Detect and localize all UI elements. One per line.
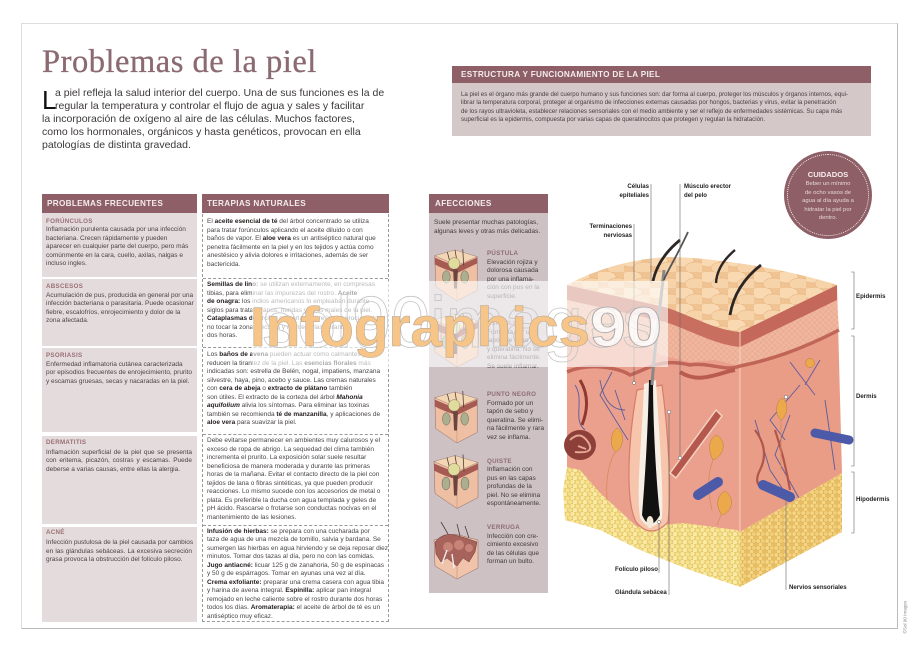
therapy: acné — [207, 528, 388, 620]
therapy: dermatitis: horas de la mañana. Evitar el contacto directo de la piel con — [207, 471, 379, 478]
afecciones intro: Suele presentar muchas patologías, — [434, 219, 538, 226]
text: estructura — [461, 91, 848, 123]
heading: problemas frecuentes: PROBLEMAS FRECUENTES — [47, 199, 163, 208]
therapy: acné: Jugo antiacné: licuar 125 g de zanahoria, 50 g de espinacas — [207, 562, 384, 569]
label: hipodermis: Hipodermis — [856, 496, 890, 503]
heading: afecciones: AFECCIONES — [435, 199, 492, 208]
card: forúnculos: comúnmente en la cara, cuello, axilas, nalgas e — [46, 252, 183, 259]
punto negro text: vez se inflama. — [487, 434, 530, 441]
credit: ©Sol 90 Images — [902, 601, 908, 634]
card: dermatitis: DERMATITIS — [46, 439, 86, 446]
pústula text — [487, 249, 540, 300]
therapy: dermatitis: incrementa el prurito. La exposición solar suele resultar — [207, 454, 366, 461]
card: psoriasis — [42, 348, 197, 432]
therapy: psoriasis: son útiles. El extracto de la corteza del árbol Mahonia — [207, 394, 363, 401]
pústula text: superficie. — [487, 293, 517, 300]
therapy: acné: remojado en leche caliente sobre el rostro durante dos horas — [207, 596, 382, 603]
card: forúnculos: Inflamación purulenta causada por una infección — [46, 226, 186, 233]
divider — [203, 278, 388, 279]
text: estructura: de los rayos ultravioleta, establecer relaciones sensoriales con el medio ambiente y ser el reflejo de enfermedades sistémicas. Su capa más — [461, 108, 842, 115]
text: estructura: La piel es el órgano más grande del cuerpo humano y sus funciones son: dar forma al cuerpo, proteger los músculos y órganos internos, equi- — [461, 91, 848, 98]
divider — [203, 525, 388, 526]
heading: estructura: ESTRUCTURA Y FUNCIONAMIENTO DE LA PIEL — [461, 70, 660, 79]
therapy: forúnculos: El aceite esencial de té del árbol concentrado se utiliza — [207, 218, 369, 225]
drop cap: L — [42, 85, 56, 115]
panel: problemas frecuentes — [42, 194, 197, 622]
watermark: 90 — [590, 295, 662, 358]
therapy: acné: sumergen las hierbas en agua hirviendo y se deja reposar diez — [207, 545, 388, 552]
heading: estructura — [452, 66, 871, 83]
therapy: dermatitis: reacciones. Lo mismo sucede con los accesorios de metal o — [207, 488, 380, 495]
callout text: agua al día ayuda a — [802, 198, 854, 204]
therapy: forúnculos — [207, 218, 376, 268]
callout text: de ocho vasos de — [805, 190, 851, 196]
divider — [203, 434, 388, 435]
therapy: dermatitis: exceso de ropa de abrigo. La sequedad del clima también — [207, 446, 374, 453]
card: abscesos — [42, 279, 197, 346]
pústula text: ción con pus en la — [487, 284, 539, 291]
therapy: acné: minutos. Tomar dos tazas al día, pero no con las comidas. — [207, 553, 375, 560]
card: forúnculos — [42, 213, 197, 277]
label: músculo erector — [684, 183, 732, 199]
quiste text: Inflamación con — [487, 466, 533, 473]
sweat gland — [564, 430, 596, 460]
heading: terapias naturales: TERAPIAS NATURALES — [207, 199, 306, 208]
quiste text: piel. No se elimina — [487, 492, 540, 499]
therapy: dermatitis: plata. Es preferible la ducha con agua templada y geles de — [207, 497, 376, 504]
text: estructura: superficial es la epidermis, compuesta por varias capas de queratinocitos que protegen y regulan la hidratación. — [461, 116, 765, 123]
icon: punto negro — [435, 391, 477, 443]
therapy: dermatitis — [207, 437, 380, 521]
therapy: psoriasis — [207, 351, 380, 426]
card: acné: en las glándulas sebáceas. La excesiva secreción — [46, 548, 192, 555]
nerve fibres — [607, 420, 781, 525]
label: células epiteliales: Células — [627, 183, 649, 190]
intro text: patologías de distinta gravedad. — [42, 139, 191, 151]
label: epidermis: Epidermis — [856, 293, 885, 300]
therapy: dermatitis: mantenimiento de las lesiones. — [207, 514, 296, 521]
label: músculo erector: del pelo — [684, 192, 707, 199]
label: nervios sensoriales: Nervios sensoriales — [789, 584, 847, 591]
therapy: forúnculos: para tratar forúnculos aplicando el aceite diluido o con — [207, 227, 363, 234]
therapy: acné: y harina de avena integral. Espinilla: aplicar pan integral — [207, 587, 371, 594]
text: estructura: librar la temperatura corporal, proteger al organismo de infecciones externas causadas por hongos, bacterias y virus, evitar la penetración — [461, 99, 836, 106]
quiste text: QUISTE — [487, 458, 512, 465]
icon: pústula — [435, 249, 477, 301]
afecciones intro: algunas leves y otras más delicadas. — [434, 228, 540, 235]
panel: afecciones — [429, 194, 548, 593]
callout ring — [787, 154, 869, 236]
therapy: abscesos: dos horas. — [207, 332, 237, 339]
card: acné: ACNÉ — [46, 529, 65, 536]
label: glándula sebácea: Glándula sebácea — [615, 589, 667, 596]
card: dermatitis — [42, 436, 197, 524]
therapy: acné: Crema exfoliante: preparar una crema casera con agua tibia — [207, 579, 384, 586]
label: dermis: Dermis — [856, 393, 877, 400]
quiste text: espontáneamente. — [487, 500, 541, 507]
pústula text: por una inflama- — [487, 276, 534, 283]
intro text: como los hormonales, orgánicos y hasta genéticos, provocan en ella — [42, 126, 361, 138]
espinilla text: elimina fácilmente. — [487, 354, 541, 361]
card: psoriasis: por episodios frecuentes de enrojecimiento, prurito — [46, 369, 192, 376]
therapy: dermatitis: pH ácido. Rascarse o frotarse son conductas nocivas en el — [207, 505, 376, 512]
blood vessels — [698, 433, 849, 497]
card: abscesos: fiebre, escalofríos, enrojecimiento y dolor de la — [46, 309, 180, 316]
verruga text — [487, 524, 539, 565]
intro text: la incorporación de oxígeno al aire de las células. Muchos factores, — [42, 113, 355, 125]
espinilla text: y queratina. No se — [487, 346, 540, 353]
therapy: psoriasis: reducen la tirantez de la piel. Las esencias florales más — [207, 360, 371, 367]
card: psoriasis: y escamas gruesas, secas y nacaradas en la piel. — [46, 378, 189, 385]
therapy: psoriasis: aquifolium alivia los síntomas. Para eliminar las toxinas — [207, 402, 369, 409]
espinilla text: ESPINILLA — [487, 320, 522, 327]
card: dermatitis: con eritema, picazón, costras y escamas. Puede — [46, 457, 192, 464]
therapy: psoriasis: Los baños de avena pueden actuar como calmantes y — [207, 351, 366, 358]
heading: afecciones — [429, 194, 548, 213]
verruga text: de las células que — [487, 550, 539, 557]
hairs — [653, 240, 761, 315]
afecciones intro — [434, 219, 540, 235]
intro text — [42, 85, 384, 151]
fat layer — [563, 467, 842, 587]
therapy: abscesos: Semillas de lino: se utilizan externamente, en compresas — [207, 281, 375, 288]
therapy: acné: y 50 g de espárragos. Tomar en ayunas una vez al día. — [207, 570, 366, 577]
label: terminaciones nerviosas — [589, 223, 632, 239]
glands — [611, 358, 814, 515]
espinilla text: tapón de sebo — [487, 337, 528, 344]
card: dermatitis: Inflamación superficial de la piel que se presenta — [46, 448, 192, 456]
callout text: dentro. — [819, 215, 837, 221]
skin cross-section illustration — [563, 184, 854, 595]
card: psoriasis: PSORIASIS — [46, 352, 82, 359]
verruga text: cimiento excesivo — [487, 541, 538, 548]
callout text: hidratar la piel por — [804, 207, 852, 213]
callout text — [802, 181, 854, 221]
icon: quiste — [434, 454, 478, 508]
heading: terapias naturales — [202, 194, 389, 213]
therapy: abscesos: Cataplasmas de arcilla: aplicarlas sobre la piel procurando — [207, 315, 378, 322]
intro text: a piel refleja la salud interior del cuerpo. Una de sus funciones es la de — [55, 87, 384, 99]
card: psoriasis: Enfermedad inflamatoria cutánea caracterizada — [46, 360, 183, 368]
punto negro text: Formado por un — [487, 400, 533, 406]
espinilla text — [487, 320, 541, 370]
pústula text: PÚSTULA — [487, 250, 518, 257]
espinilla text: Formada por un — [487, 328, 533, 336]
card: forúnculos: bacteriana. Crecen rápidamente y pueden — [46, 235, 167, 242]
verruga text: forman un bulto. — [487, 558, 534, 565]
therapy: psoriasis: aloe vera para suavizar la piel. — [207, 419, 297, 426]
card: abscesos: Acumulación de pus, producida en general por una — [46, 292, 193, 298]
therapy: forúnculos: penetra fácilmente en la piel y en los tejidos y actúa como — [207, 244, 374, 251]
therapy: forúnculos: baños de vapor. El aloe vera es un antiséptico natural que — [207, 235, 376, 242]
callout: cuidados — [784, 151, 872, 239]
therapy: dermatitis: Debe evitarse permanecer en ambientes muy calurosos y el — [207, 437, 380, 444]
therapy: abscesos: tibias, para eliminar las impurezas del rostro. Aceite — [207, 290, 357, 297]
label leader lines — [634, 184, 854, 595]
label: células epiteliales — [620, 183, 649, 199]
therapy: acné: taza de agua de una mezcla de tomillo, salvia y bardana. Se — [207, 536, 381, 543]
panel: terapias naturales — [202, 194, 389, 622]
card: acné — [42, 527, 197, 622]
label: músculo erector: Músculo erector — [684, 183, 731, 190]
card: abscesos: ABSCESOS — [46, 283, 83, 290]
callout heading: CUIDADOS — [808, 170, 848, 179]
therapy: abscesos: de onagra: los indios americanos lo empleaban durante — [207, 298, 369, 305]
hair follicle — [629, 232, 688, 531]
card: abscesos: infección bacteriana o parasitaria. Puede ocasionar — [46, 300, 194, 307]
therapy: forúnculos: bactericida. — [207, 261, 240, 268]
card: dermatitis: deberse a varias causas, entre ellas la alergia. — [46, 466, 180, 473]
watermark: Infographics — [250, 295, 590, 358]
card: acné: Infección pustulosa de la piel causada por cambios — [46, 539, 193, 546]
quiste text — [487, 458, 541, 507]
heading: problemas frecuentes — [42, 194, 197, 213]
icon: verruga — [434, 522, 478, 579]
therapy: acné: Infusión de hierbas: se prepara con una cucharada por — [207, 528, 370, 535]
card: abscesos: zona afectada. — [46, 317, 89, 324]
therapy: forúnculos: anestésico y alivia dolores e irritaciones, además de ser — [207, 252, 368, 259]
therapy: psoriasis: silvestre, haya, pino, acebo y sauce. Las cremas naturales — [207, 377, 376, 384]
title: Problemas de la piel — [42, 44, 317, 80]
therapy: psoriasis: indicadas son: estrella de Belén, nogal, impatiens, manzana — [207, 368, 380, 375]
label: terminaciones nerviosas: Terminaciones — [589, 223, 632, 230]
therapy: dermatitis: tejidos de lana o fibras sintéticas, ya que pueden producir — [207, 480, 373, 487]
panel: estructura y funcionamiento — [452, 66, 871, 136]
therapy: acné: todos los días. Aromaterapia: el aceite de árbol de té es un — [207, 604, 380, 611]
punto negro text: na fácilmente y rara — [487, 425, 544, 432]
watermark: sol90images — [262, 283, 657, 363]
therapy: psoriasis: con cera de abeja o extracto de plátano también — [207, 385, 352, 392]
divider — [203, 347, 388, 348]
card: forúnculos: incluso ingles. — [46, 260, 87, 267]
punto negro text: tapón de sebo y — [487, 408, 533, 415]
quiste text: profundas de la — [487, 483, 532, 490]
icon: espinilla — [434, 313, 478, 367]
pústula text: Elevación rojiza y — [487, 258, 538, 266]
therapy: acné: antiséptico muy eficaz. — [207, 613, 273, 620]
pústula text: dolorosa causada — [487, 267, 538, 274]
callout text: Beber un mínimo — [806, 181, 850, 187]
punto negro text — [487, 391, 544, 441]
label: terminaciones nerviosas: nerviosas — [604, 232, 632, 239]
card: forúnculos: FORÚNCULOS — [46, 218, 93, 225]
therapy: psoriasis: también se recomienda té de manzanilla, y aplicaciones de — [207, 411, 380, 418]
card: forúnculos: aparecer en cualquier parte del cuerpo, pero más — [46, 243, 188, 250]
therapy: dermatitis: beneficiosa de manera moderada y durante las primeras — [207, 463, 370, 470]
card: acné: grasa provoca la obstrucción del folículo piloso. — [46, 556, 183, 563]
punto negro text: queratina. Se elimi- — [487, 417, 543, 424]
espinilla text: Se suele inflamar. — [487, 363, 539, 370]
therapy: abscesos: no tocar la zona afectada y mantenerlas durante — [207, 324, 346, 331]
erector muscle — [670, 410, 722, 478]
label: células epiteliales: epiteliales — [620, 192, 649, 199]
therapy: abscesos: siglos para tratar granos, heridas y otros males de la piel. — [207, 307, 372, 314]
verruga text: Infección con cre- — [487, 532, 538, 540]
label: folículo piloso: Folículo piloso — [615, 566, 658, 573]
intro text: regular la temperatura y controlar el flujo de agua y sales y facilitar — [55, 100, 364, 112]
punto negro text: PUNTO NEGRO — [487, 391, 536, 398]
verruga text: VERRUGA — [487, 524, 520, 531]
quiste text: pus en las capas — [487, 475, 536, 482]
therapy: abscesos — [207, 281, 378, 339]
